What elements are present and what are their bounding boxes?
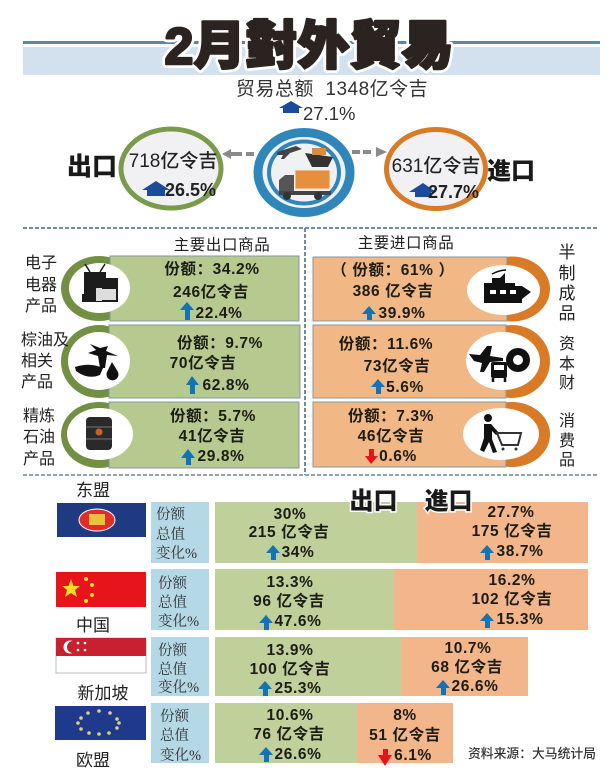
flag: China: [56, 572, 146, 607]
panel: electronics export: [61, 256, 299, 322]
label: Singapore: 新加坡: [78, 684, 128, 703]
source note: 资料来源：大马统计局: [468, 746, 596, 761]
label: semi-finished: 半: [558, 243, 576, 262]
row: Singapore: [151, 637, 528, 697]
legend: import column: 進口: [424, 488, 472, 515]
row: ASEAN: 38.7%: [497, 543, 543, 560]
label: refined petroleum: 产品: [23, 450, 55, 468]
title banner: 2月對外貿易: [165, 18, 453, 76]
label: palm oil: 产品: [21, 373, 53, 391]
panel: electronics export: 22.4%: [196, 305, 242, 322]
row: EU: 份额: [160, 708, 189, 725]
label: semi-finished: 制: [558, 264, 576, 283]
row: China: [151, 569, 588, 630]
row: ASEAN: 30%: [274, 506, 306, 523]
row: Singapore: 25.3%: [275, 680, 321, 697]
label: capital goods: 资: [559, 335, 575, 353]
row: EU: 变化%: [160, 747, 201, 764]
label: semi-finished: 成: [558, 284, 576, 303]
panel: semi-finished import: （ 份额：61% ）: [331, 261, 455, 279]
row: Singapore: 26.6%: [452, 678, 498, 695]
row: EU: 26.6%: [275, 746, 321, 763]
panel: refined petroleum export: 29.8%: [198, 448, 244, 465]
label: ASEAN: 东盟: [76, 481, 110, 500]
panel: consumer goods import: [313, 402, 550, 467]
row: China: 47.6%: [275, 613, 321, 630]
panel: refined petroleum export: 份额：5.7%: [170, 407, 256, 425]
export label: 出口: [67, 153, 117, 181]
label: electronics: 电器: [25, 276, 57, 294]
legend: export column: 出口: [350, 488, 398, 515]
row: ASEAN: 变化%: [156, 545, 197, 562]
row: Singapore: 100 亿令吉: [250, 659, 330, 678]
row: EU: 10.6%: [267, 707, 313, 724]
row: China: 102 亿令吉: [472, 589, 552, 608]
panel: capital goods import: 5.6%: [386, 379, 424, 396]
row: Singapore: 变化%: [158, 679, 199, 696]
flag: ASEAN: [57, 503, 146, 537]
row: Singapore: 13.9%: [267, 642, 313, 659]
row: Singapore: 68 亿令吉: [431, 657, 503, 676]
panel: electronics export: 份额：34.2%: [164, 260, 260, 278]
label: electronics: 产品: [25, 297, 57, 315]
label: palm oil: 相关: [21, 352, 53, 370]
label: capital goods: 本: [559, 355, 575, 373]
flag: Singapore: [56, 638, 146, 673]
panel: consumer goods import: 0.6%: [379, 448, 417, 465]
row: China: 15.3%: [497, 611, 543, 628]
label: capital goods: [559, 335, 575, 392]
panel: palm oil export: 70亿令吉: [170, 353, 236, 372]
label: electronics: [25, 254, 57, 315]
label: refined petroleum: 精炼: [23, 407, 55, 425]
row: EU: [151, 703, 453, 766]
panel: capital goods import: [313, 325, 550, 398]
label: consumer goods: 费: [559, 432, 575, 450]
panel: consumer goods import: 份额：7.3%: [348, 407, 434, 425]
panel: capital goods import: 73亿令吉: [364, 356, 430, 375]
title banner: 2月對外貿易: [165, 18, 453, 76]
panel: semi-finished import: [313, 256, 550, 322]
row: EU: 8%: [393, 707, 417, 724]
row: EU: 6.1%: [394, 747, 432, 764]
panel: refined petroleum export: [61, 402, 299, 468]
label: capital goods: 财: [559, 374, 575, 392]
label: consumer goods: 消: [559, 412, 575, 430]
icon: trade transport hub: [258, 132, 350, 212]
panel: electronics export: 246亿令吉: [173, 282, 249, 301]
panel: refined petroleum export: 41亿令吉: [179, 426, 245, 445]
label: electronics: 电子: [25, 254, 57, 272]
label: refined petroleum: 石油: [23, 428, 55, 446]
total trade value: 27.1%: [303, 103, 355, 124]
row: EU: 51 亿令吉: [369, 725, 441, 744]
import label: 進口: [487, 158, 535, 185]
export circle: 718亿令吉: [129, 150, 217, 172]
export circle: 26.5%: [165, 180, 216, 200]
panel: consumer goods import: 46亿令吉: [358, 426, 424, 445]
label: semi-finished: 品: [558, 304, 576, 323]
panel: semi-finished import: 386 亿令吉: [353, 281, 433, 300]
label: palm oil: [21, 331, 69, 391]
label: semi-finished: [558, 243, 576, 323]
export circle: [121, 129, 221, 208]
import circle: 631亿令吉: [392, 155, 480, 177]
row: China: 16.2%: [489, 572, 535, 589]
row: China: 96 亿令吉: [253, 591, 325, 610]
panel: palm oil export: [61, 325, 300, 398]
panel: palm oil export: 份额：9.7%: [177, 334, 263, 352]
label: consumer goods: [559, 412, 575, 469]
import circle: [386, 130, 486, 208]
row: ASEAN: 份额: [156, 506, 185, 523]
label: China: 中国: [76, 616, 110, 635]
row: China: 变化%: [158, 613, 199, 630]
row: ASEAN: [151, 502, 588, 563]
panel: capital goods import: 份额：11.6%: [339, 335, 433, 353]
row: ASEAN: 215 亿令吉: [249, 522, 329, 541]
row: EU: 总值: [160, 726, 189, 744]
import circle: 27.7%: [428, 182, 479, 202]
row: China: 份额: [158, 575, 187, 592]
panel: palm oil export: 62.8%: [203, 377, 249, 394]
label: consumer goods: 品: [559, 452, 575, 469]
row: Singapore: 10.7%: [445, 640, 491, 657]
row: ASEAN: 34%: [282, 544, 314, 561]
row: China: 总值: [158, 593, 187, 611]
heading: main imports: 主要进口商品: [358, 234, 454, 252]
total trade value: 贸易总额 1348亿令吉: [236, 78, 428, 100]
label: refined petroleum: [23, 407, 55, 468]
row: Singapore: 份额: [158, 642, 187, 659]
label: palm oil: 棕油及: [21, 331, 69, 349]
row: ASEAN: 总值: [156, 525, 185, 543]
row: Singapore: 总值: [158, 660, 187, 678]
title banner: [23, 18, 600, 76]
row: ASEAN: 175 亿令吉: [472, 521, 552, 540]
panel: semi-finished import: 39.9%: [379, 305, 425, 322]
arrow: to import: [352, 147, 387, 157]
row: ASEAN: 27.7%: [488, 504, 534, 521]
row: EU: 76 亿令吉: [253, 724, 325, 743]
label: EU: 欧盟: [76, 751, 110, 770]
total trade value: [236, 78, 428, 124]
arrow: to export: [222, 149, 254, 159]
flag: EU: [55, 706, 146, 740]
heading: main exports: 主要出口商品: [174, 236, 270, 254]
row: China: 13.3%: [267, 574, 313, 591]
